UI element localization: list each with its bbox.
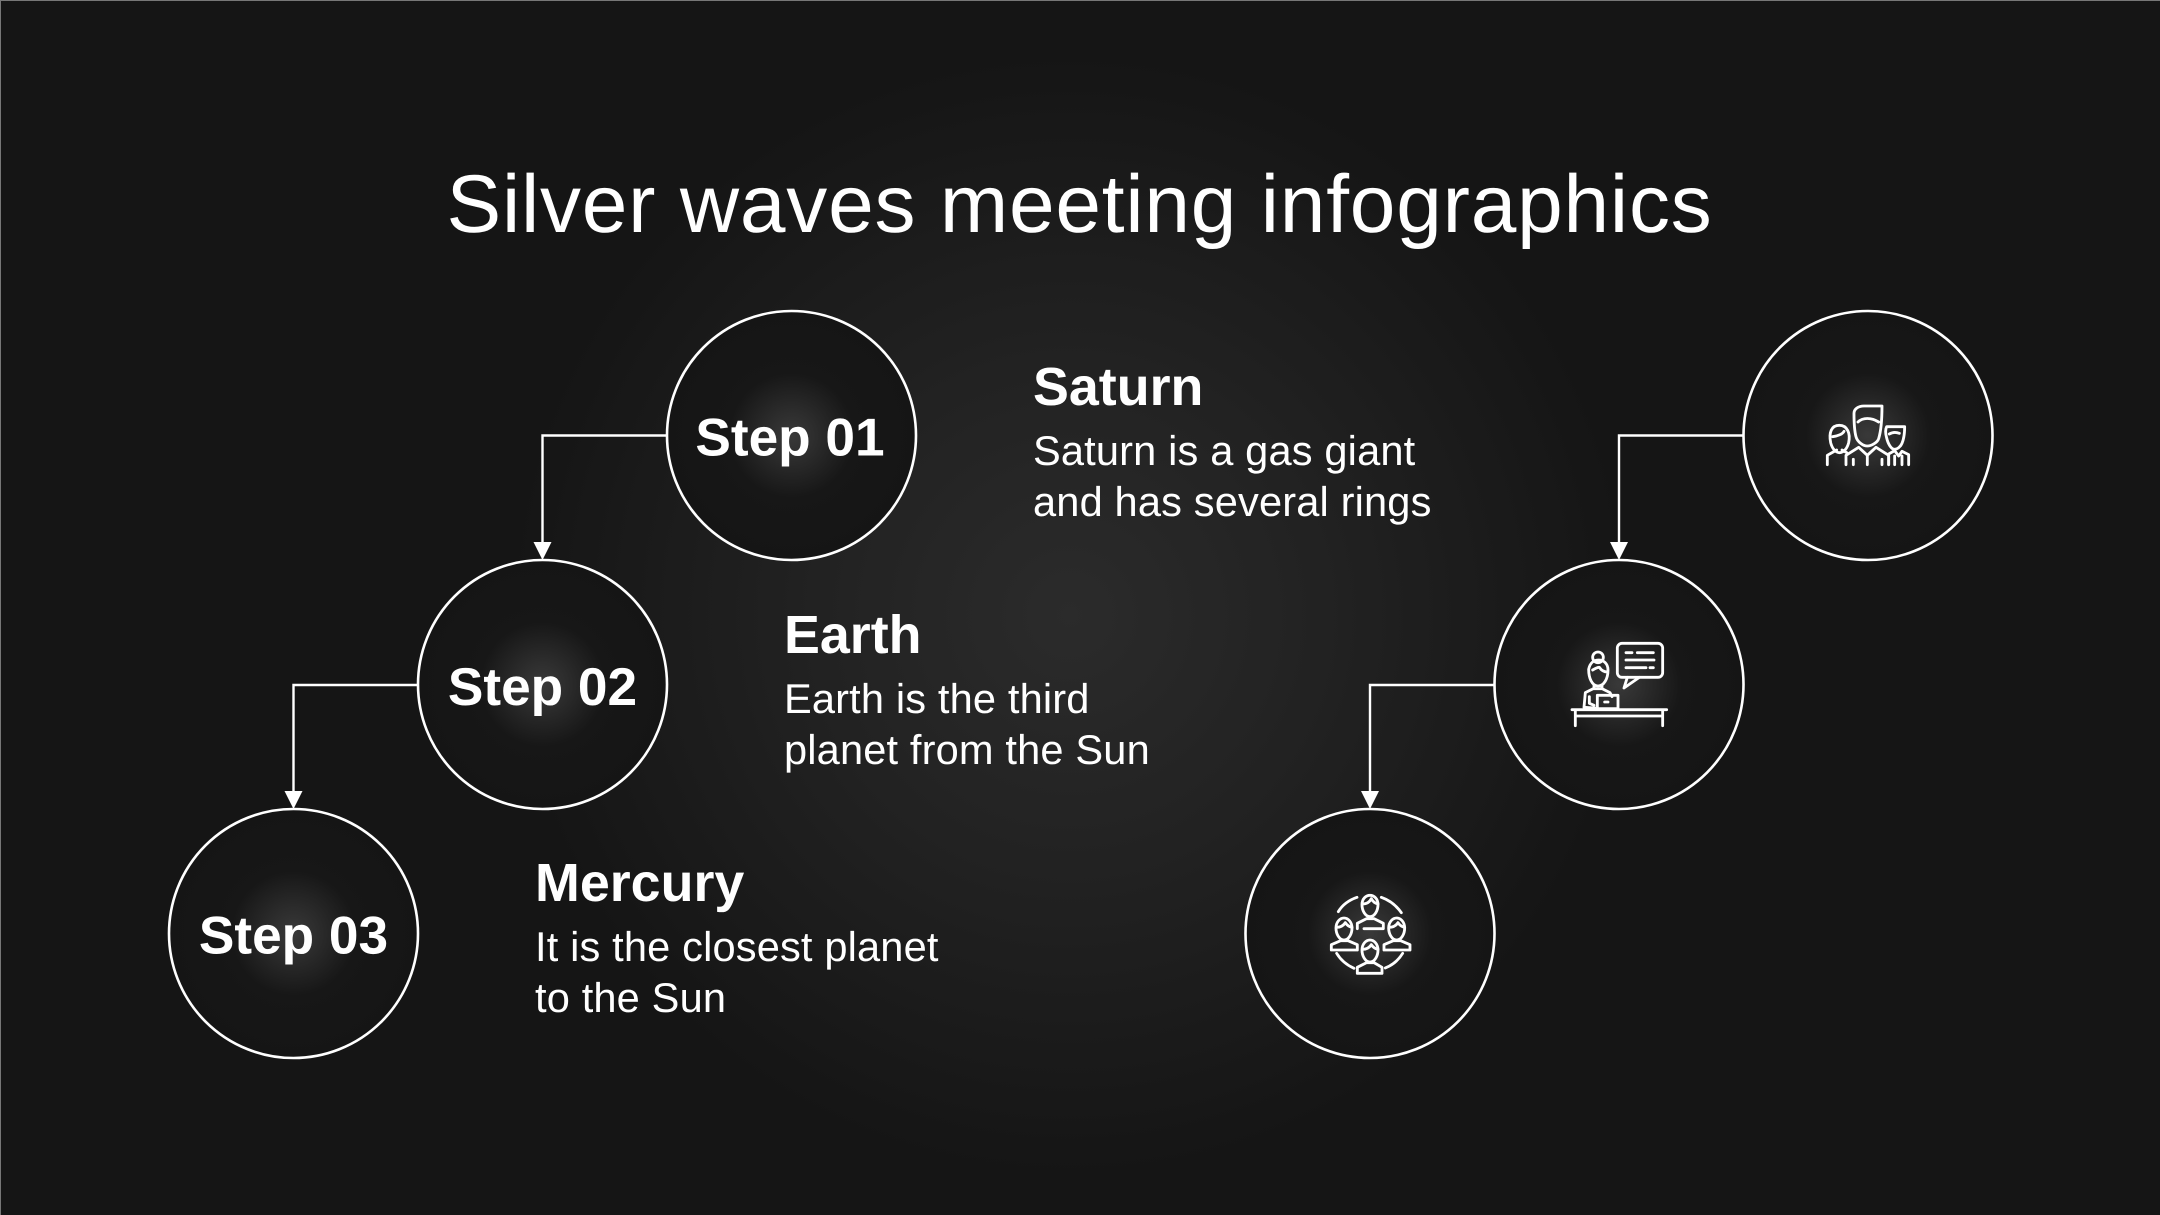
right circle 2 [1494, 560, 1744, 809]
icon: woman at desk with speech bubble [1572, 643, 1667, 726]
text block: Earth: Earth [784, 605, 922, 665]
text block: Earth [784, 605, 1150, 773]
icon: group of four people in a circle [1331, 895, 1410, 973]
text block: Saturn: and has several rings [1033, 478, 1432, 525]
arrow: step 02 to step 03 [284, 685, 418, 809]
icon: team of three people [1827, 406, 1909, 465]
arrow: right icon 1 to icon 2 [1610, 436, 1744, 560]
text block: Earth: Earth is the third [784, 675, 1090, 722]
right circle 1 [1744, 311, 1992, 560]
text block: Saturn [1033, 357, 1432, 525]
text block: Mercury [535, 853, 939, 1021]
step 03 circle [169, 809, 418, 1058]
text block: Earth: planet from the Sun [784, 726, 1150, 773]
text block: Mercury: It is the closest planet [535, 923, 939, 970]
title: Silver waves meeting infographics [446, 159, 1713, 250]
text block: Saturn: Saturn [1033, 357, 1203, 417]
text block: Mercury: Mercury [535, 853, 744, 913]
step 01 circle [667, 311, 916, 560]
right circle 3 [1246, 809, 1494, 1058]
text block: Saturn: Saturn is a gas giant [1033, 427, 1416, 474]
arrow: right icon 2 to icon 3 [1361, 685, 1494, 809]
step 02 circle [418, 560, 667, 809]
text block: Mercury: to the Sun [535, 974, 726, 1021]
step 03 circle: Step 03 [199, 906, 388, 966]
step 01 circle: Step 01 [695, 408, 885, 468]
step 02 circle: Step 02 [448, 658, 637, 717]
arrow: step 01 to step 02 [534, 436, 667, 560]
